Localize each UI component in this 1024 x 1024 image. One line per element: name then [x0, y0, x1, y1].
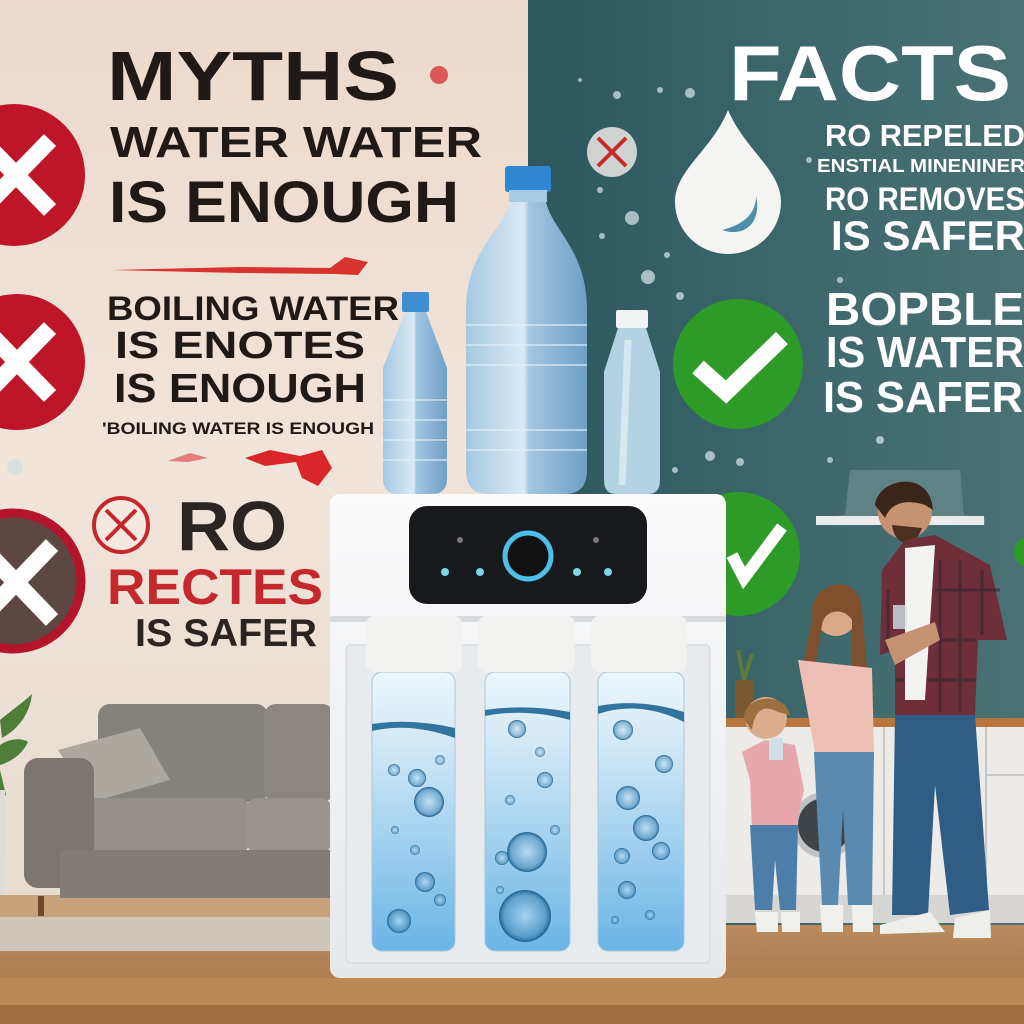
bottle: left [383, 292, 447, 494]
fact text 1: RO REPELED [825, 118, 1024, 153]
fact text 2: IS SAFER [823, 373, 1023, 422]
myth text 2 [102, 290, 399, 438]
myth text 3: IS SAFER [135, 612, 317, 655]
bottle: right [604, 310, 660, 494]
icon: x 1 [0, 104, 85, 246]
icon: small red x [94, 498, 148, 552]
droplets [7, 78, 884, 475]
kitchen counter [726, 718, 1024, 923]
myth text 2: 'BOILING WATER IS ENOUGH [102, 419, 374, 438]
icon: x 3 [0, 513, 81, 649]
myth text 2: IS ENOTES [115, 325, 365, 367]
icon: check edge [1014, 536, 1024, 568]
heading: facts: FACTS [729, 29, 1011, 117]
myth text 3: RECTES [107, 559, 323, 615]
fact text 1: ENSTIAL MINENINER [817, 156, 1024, 176]
floor [0, 895, 1024, 1024]
myth text 2: BOILING WATER [107, 290, 399, 328]
panel: myths background [0, 0, 528, 930]
filter 1 [366, 616, 462, 951]
panel: facts background [528, 0, 1024, 930]
control panel [409, 506, 647, 604]
fact text 2 [823, 283, 1024, 422]
icon: x 2 [0, 294, 85, 430]
icon: check 1 [673, 299, 803, 429]
myth text 1: IS ENOUGH [109, 170, 459, 235]
myth text 2: IS ENOUGH [114, 365, 366, 411]
filter 2 [478, 616, 575, 951]
heading: myths: MYTHS [107, 37, 399, 115]
fact text 1 [817, 118, 1024, 259]
rug [0, 917, 330, 951]
bottle: large centre [466, 166, 587, 494]
filter 3 [591, 616, 687, 951]
myth text 1 [109, 118, 482, 235]
icon: check 2 [676, 492, 800, 616]
person: father [875, 482, 1007, 938]
fact text 2: BOPBLE [826, 283, 1024, 335]
person: child [742, 697, 804, 932]
shelf [816, 470, 985, 525]
icon: small crossed circle [587, 127, 637, 177]
myth text 1: WATER WATER [110, 118, 482, 167]
red brush stroke 1 [113, 257, 368, 275]
purifier body [330, 494, 726, 978]
plant in kitchen [735, 650, 753, 718]
person: girl [798, 584, 874, 932]
icon: water drop [675, 110, 781, 254]
myth text 3 [107, 487, 323, 655]
sofa [24, 704, 334, 916]
fact text 1: IS SAFER [831, 212, 1024, 259]
plant [0, 694, 32, 895]
icon: red splash [430, 66, 448, 84]
myth text 3: RO [177, 487, 287, 565]
red brush stroke 2 [168, 450, 332, 486]
